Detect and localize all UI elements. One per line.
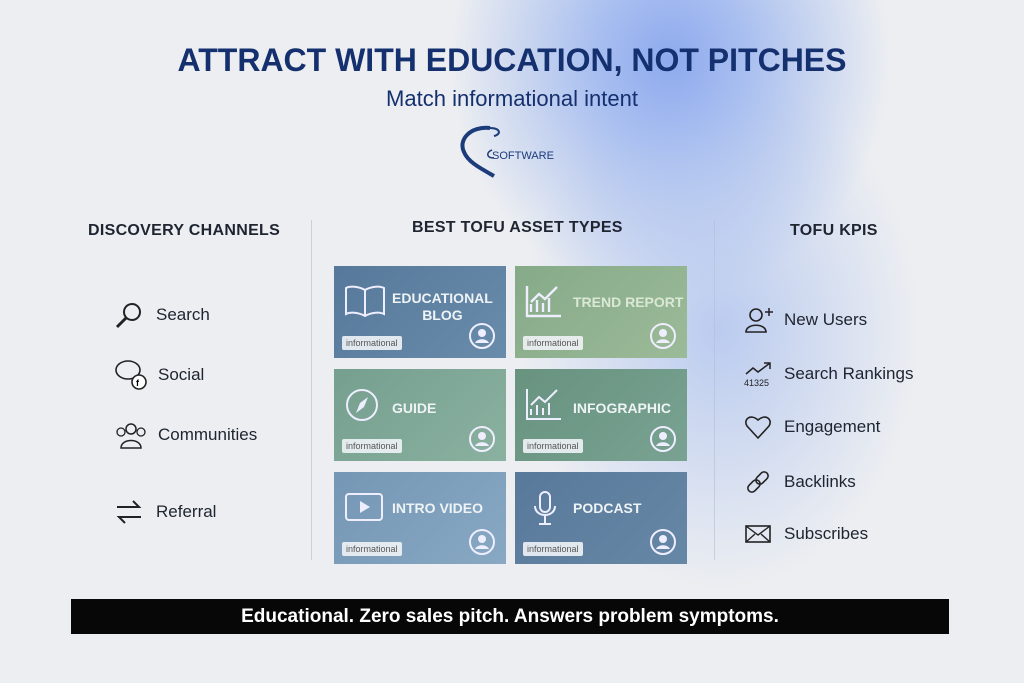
card: educational blog: informational	[346, 338, 398, 348]
kpi: new users	[745, 308, 867, 333]
kpi: search rankings: Search Rankings	[784, 364, 913, 383]
kpi: search rankings: 41325	[744, 378, 769, 388]
item: social: f	[136, 378, 140, 388]
card: intro video: INTRO VIDEO	[392, 500, 483, 516]
card: educational blog	[334, 266, 506, 358]
item: search: Search	[156, 305, 210, 324]
card: infographic	[515, 369, 687, 461]
card: trend report	[515, 266, 687, 358]
card: podcast	[515, 472, 687, 564]
card: intro video: informational	[346, 544, 398, 554]
kpi: backlinks: Backlinks	[784, 472, 856, 491]
item: communities	[116, 423, 257, 449]
card: trend report: TREND REPORT	[573, 294, 683, 310]
item: communities: Communities	[158, 425, 257, 444]
kpi: new users: New Users	[784, 310, 867, 329]
card: trend report: informational	[527, 338, 579, 348]
kpi: subscribes: Subscribes	[784, 524, 868, 543]
footer banner	[71, 599, 949, 634]
card: intro video	[334, 472, 506, 564]
item: referral	[116, 500, 216, 524]
item: referral: Referral	[156, 502, 216, 521]
subtitle: Match informational intent	[386, 86, 638, 111]
card: guide: GUIDE	[392, 400, 436, 416]
card: educational blog: BLOG	[422, 307, 463, 323]
kpi: engagement	[745, 416, 880, 439]
card: podcast: PODCAST	[573, 500, 641, 516]
kpi: search rankings	[744, 362, 913, 388]
heading: discovery channels: DISCOVERY CHANNELS	[88, 222, 280, 239]
card: infographic: informational	[527, 441, 579, 451]
item: social: Social	[158, 365, 204, 384]
card: educational blog: EDUCATIONAL	[392, 290, 493, 306]
card: infographic: INFOGRAPHIC	[573, 400, 671, 416]
item: social	[115, 360, 204, 390]
grid: asset cards	[334, 266, 687, 564]
kpi: engagement: Engagement	[784, 417, 880, 436]
logo	[460, 126, 554, 178]
card: guide	[334, 369, 506, 461]
card: guide: informational	[346, 441, 398, 451]
title: ATTRACT WITH EDUCATION, NOT PITCHES	[178, 42, 846, 78]
footer banner: Educational. Zero sales pitch. Answers problem symptoms.	[241, 606, 779, 627]
kpi: subscribes	[745, 524, 868, 543]
item: search	[116, 303, 210, 328]
list: discovery channels	[115, 303, 257, 524]
list: kpis	[744, 308, 913, 543]
heading: tofu kpis: TOFU KPIS	[790, 222, 878, 239]
logo: SOFTWARE	[492, 150, 554, 162]
kpi: backlinks	[747, 471, 856, 493]
card: podcast: informational	[527, 544, 579, 554]
heading: asset types: BEST TOFU ASSET TYPES	[412, 219, 623, 236]
